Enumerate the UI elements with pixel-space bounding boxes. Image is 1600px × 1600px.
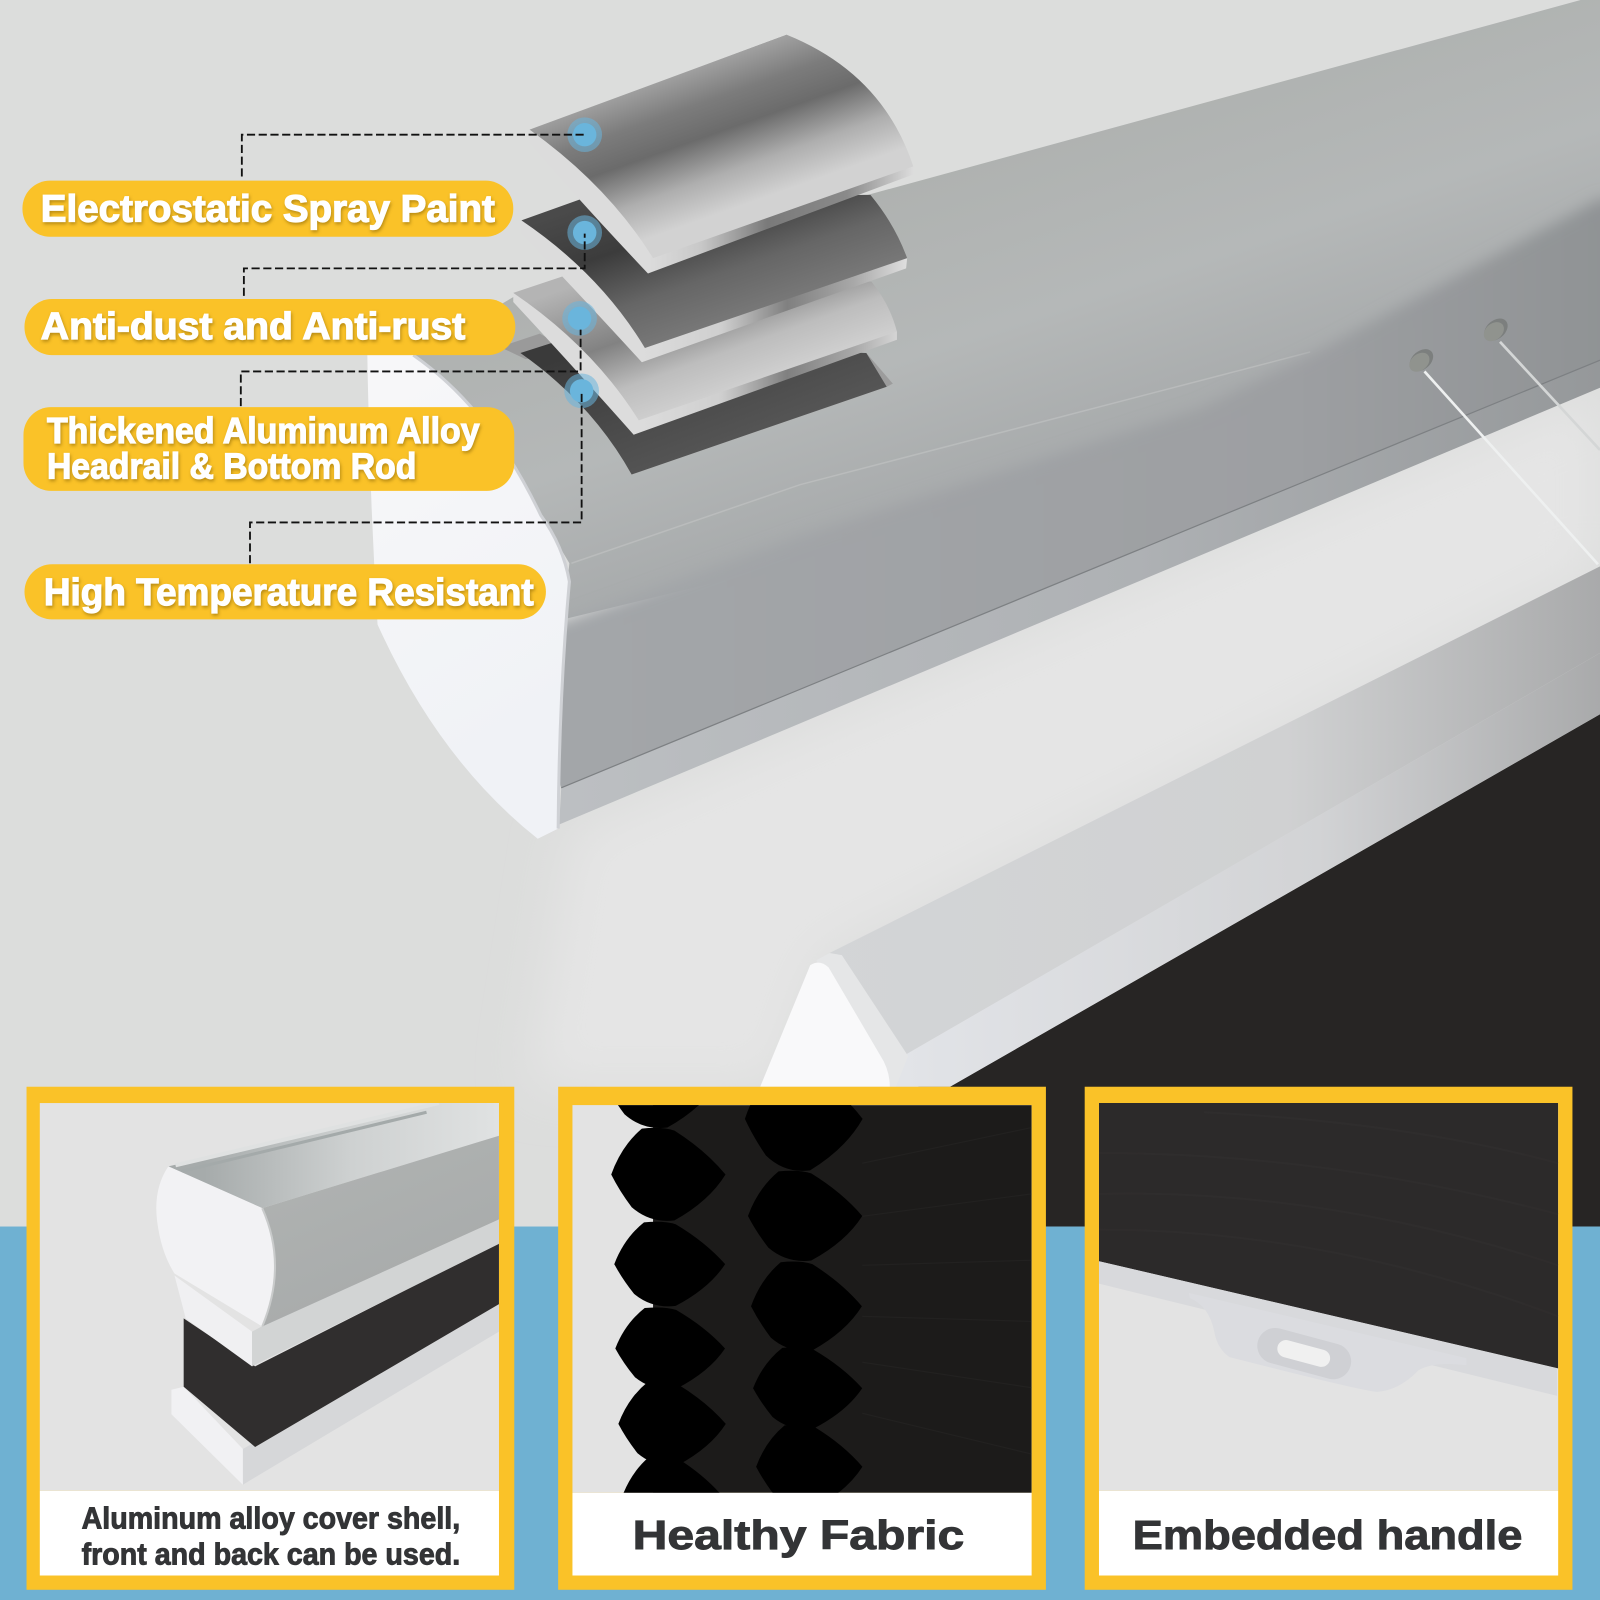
panel: healthy fabric: [558, 1035, 1046, 1590]
panel: embedded handle: [1085, 1087, 1572, 1590]
label: Electrostatic Spray Paint: [22, 181, 513, 237]
layer: spray paint slab: [530, 35, 913, 273]
label: Thickened Aluminum Alloy Headrail and Bottom Rod: Headrail & Bottom Rod: [47, 447, 416, 487]
rail collar: [816, 953, 908, 1087]
label: High Temperature Resistant: High Temperature Resistant: [44, 571, 534, 613]
marker dots: [562, 117, 602, 408]
panel: aluminum alloy cover shell: [27, 1087, 514, 1590]
caption: front and back can be used.: [82, 1537, 460, 1571]
lower face: [560, 196, 1600, 788]
caption: Healthy Fabric: [633, 1512, 964, 1558]
label: Electrostatic Spray Paint: Electrostatic Spray Paint: [41, 187, 495, 229]
rail face: [830, 566, 1600, 1066]
layer: anti-dust slab: [521, 195, 907, 362]
light area under headrail: [531, 388, 1600, 1087]
lower lip: [559, 360, 1600, 824]
rail end cap: [760, 963, 890, 1087]
cords and grommets: [1405, 314, 1600, 564]
layer: aluminum alloy slab: [513, 276, 897, 435]
product photo: honeycomb cells: [611, 1105, 1032, 1493]
blue band: [0, 1227, 1600, 1600]
bottom rail: [760, 566, 1600, 1087]
upper face: [413, 0, 1600, 619]
layer: dark base slab: [500, 334, 893, 474]
product photo: handle: [1099, 1103, 1558, 1396]
caption: Embedded handle: [1133, 1512, 1522, 1558]
headrail body: [413, 0, 1600, 847]
product photo: cover shell: [156, 1103, 499, 1485]
label: Anti-dust and Anti-rust: [24, 299, 515, 355]
dashed leader lines: [241, 135, 585, 563]
headrail end cap: [367, 355, 569, 839]
label: Anti-dust and Anti-rust: Anti-dust and Anti-rust: [41, 305, 466, 347]
dark fabric: [918, 714, 1600, 1227]
label: Thickened Aluminum Alloy Headrail and Bottom Rod: Thickened Aluminum Alloy: [47, 411, 480, 451]
label: Thickened Aluminum Alloy Headrail and Bottom Rod: [23, 407, 514, 491]
rail lower strip: [890, 653, 1600, 1087]
crease: [571, 352, 1310, 563]
caption: Aluminum alloy cover shell,: [82, 1502, 460, 1536]
caption: [82, 1502, 460, 1571]
